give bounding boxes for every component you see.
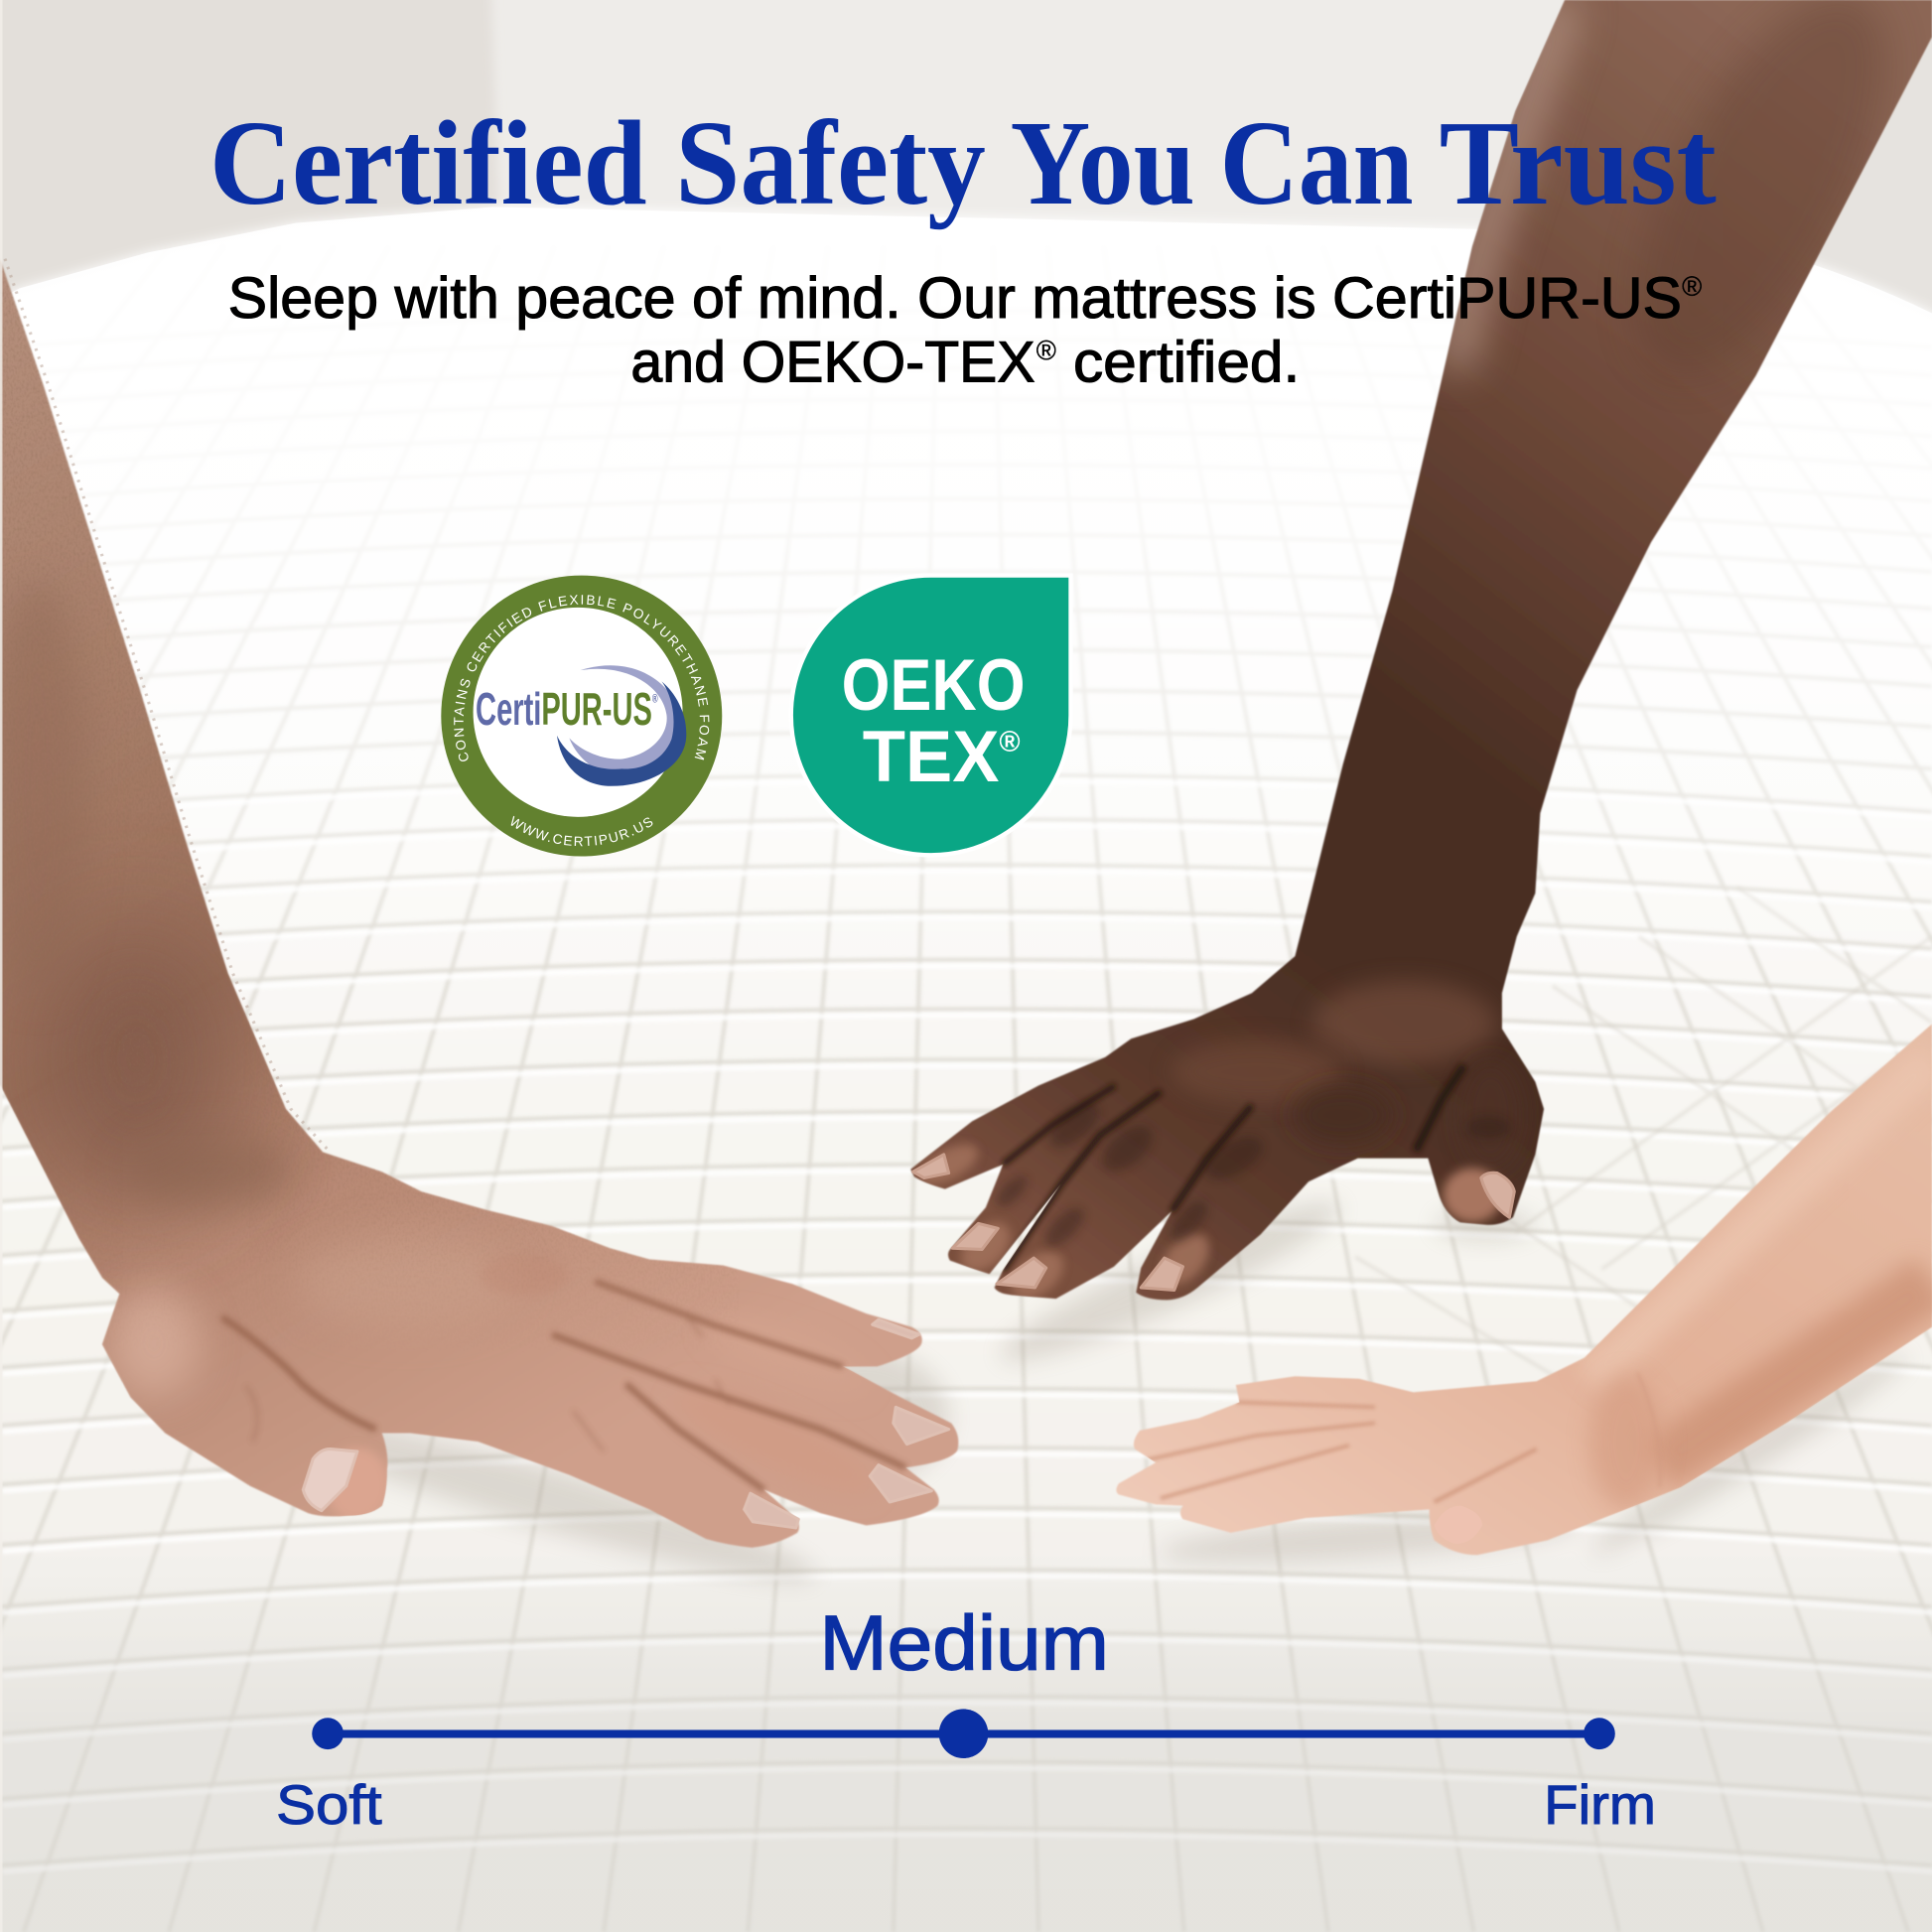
edge strip on the left of the photo (0, 0, 2, 1932)
badge: OEKO-TEX leaf (791, 576, 1070, 855)
nails: dark-skinned hand (913, 1155, 1514, 1290)
child's hand creases (1147, 1399, 1537, 1504)
title: You (1011, 97, 1195, 230)
finger separations (221, 1282, 905, 1489)
scale label: Firm: Firm (1544, 1773, 1656, 1836)
subtitle text: ® (1682, 271, 1702, 302)
subtitle text (228, 266, 1702, 395)
arm hair fuzz (5, 259, 328, 1150)
subtitle text: and OEKO-TEX (630, 331, 1035, 395)
knuckle creases (992, 1095, 1511, 1253)
title: Certified (209, 97, 647, 230)
title (209, 97, 1717, 230)
subtitle text: ® (1036, 335, 1056, 365)
photo: man's arm and hand (0, 246, 958, 1548)
fingertips warm tone (917, 1142, 1213, 1298)
title: Safety (675, 97, 986, 230)
swirl: light crescent (569, 665, 684, 776)
swirl: dark crescent (557, 681, 686, 786)
photo: child's arm and hand (1116, 1024, 1932, 1555)
subtitle text: Sleep with peace of mind. Our mattress is CertiPUR-US (228, 266, 1682, 331)
logotype: CertiPUR-US (476, 683, 716, 735)
ring text: website: WWW.CERTIPUR.US (510, 816, 653, 846)
OEKO wordmark: OEKO (842, 644, 1026, 726)
firmness label: Medium: Medium (819, 1599, 1109, 1687)
subtitle text: certified. (1073, 331, 1300, 395)
nail: child's thumb (1435, 1506, 1482, 1544)
TEX wordmark: TEX (863, 716, 1004, 797)
scale label: Soft: Soft (276, 1773, 382, 1836)
background photo: wall behind the bed (0, 0, 1932, 369)
title: Trust (1440, 97, 1717, 230)
logotype: ® (652, 691, 658, 705)
badge: CertiPUR-US seal (441, 576, 723, 856)
finger separations (1003, 1066, 1463, 1271)
shadow: hand impressions in the mattress (261, 1181, 1915, 1603)
TEX wordmark: ® (999, 726, 1021, 759)
nails: man's hand (303, 1319, 949, 1528)
title: Can (1220, 97, 1414, 230)
ring text: certification statement: CONTAINS CERTIFIED FLEXIBLE POLYURETHANE FOAM (454, 595, 709, 761)
photo: dark-skinned arm and hand (910, 0, 1932, 1309)
firmness scale (312, 1709, 1615, 1758)
